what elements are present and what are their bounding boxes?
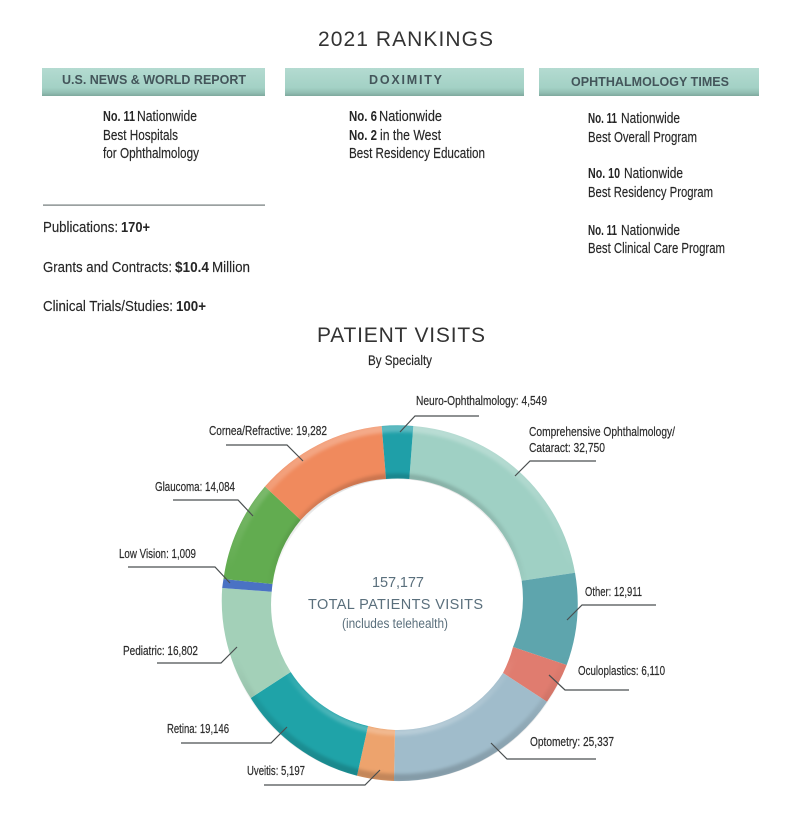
rank: No. 6 nationwide: Nationwide xyxy=(379,108,442,125)
label: optometry: Optometry: 25,337 xyxy=(530,734,614,749)
panel: statistics xyxy=(43,204,265,315)
center text: total patient visits xyxy=(308,575,483,631)
text: best hospitals: Best Hospitals xyxy=(103,127,178,144)
rank: No. 6 nationwide: No. 6 xyxy=(349,108,377,125)
label: optometry xyxy=(491,734,614,759)
stat: publications: 170+ xyxy=(121,219,150,236)
segment: low vision xyxy=(222,579,272,592)
label: low vision: Low Vision: 1,009 xyxy=(119,546,196,561)
segment: glaucoma xyxy=(224,486,301,584)
label: retina: Retina: 19,146 xyxy=(167,721,229,736)
label: uveitis xyxy=(247,763,380,785)
rank: No. 11 nationwide xyxy=(103,108,197,125)
label: glaucoma xyxy=(155,479,253,516)
rank: No. 11 nationwide: Nationwide xyxy=(137,108,197,125)
panel: Doximity xyxy=(285,68,524,162)
label: uveitis: Uveitis: 5,197 xyxy=(247,763,305,778)
rank: clinical care: No. 11 xyxy=(588,222,617,239)
rank: residency: Nationwide xyxy=(624,165,683,182)
label: oculoplastics xyxy=(549,663,665,690)
label: comprehensive ophthalmology: Cataract: 32,750 xyxy=(529,440,605,455)
label: cornea/refractive: Cornea/Refractive: 19,282 xyxy=(209,423,327,438)
rank: overall: Nationwide xyxy=(621,110,680,127)
rank: clinical care: Best Clinical Care Program xyxy=(588,240,725,257)
rank: overall: Best Overall Program xyxy=(588,129,697,146)
segment: other xyxy=(513,573,578,665)
stat: grants and contracts: $10.4 xyxy=(175,259,210,276)
stat: clinical trials: 100+ xyxy=(176,298,206,315)
segment: cornea/refractive xyxy=(265,426,386,520)
label: neuro-ophthalmology: Neuro-Ophthalmology: 4,549 xyxy=(416,393,547,408)
heading: Ophthalmology Times: OPHTHALMOLOGY TIMES xyxy=(571,75,729,89)
center text: total patient visits: TOTAL PATIENTS VISITS xyxy=(308,597,483,613)
rank: clinical care xyxy=(588,222,725,257)
stat: publications: Publications: xyxy=(43,219,118,236)
label: glaucoma: Glaucoma: 14,084 xyxy=(155,479,235,494)
segment: optometry xyxy=(394,673,547,781)
rank: No. 2 in the West: in the West xyxy=(380,127,442,144)
label: low vision xyxy=(119,546,230,583)
label: comprehensive ophthalmology xyxy=(515,424,675,476)
segment: neuro-ophthalmology xyxy=(382,425,413,479)
segment: oculoplastics xyxy=(503,647,567,702)
rank: clinical care: Nationwide xyxy=(621,222,680,239)
rank: No. 6 nationwide xyxy=(349,108,442,125)
banner: Doximity xyxy=(285,68,524,96)
stat: grants and contracts: Grants and Contracts: xyxy=(43,259,172,276)
rank: residency xyxy=(588,165,713,201)
rank: residency: No. 10 xyxy=(588,165,620,182)
center text: total patient visits: 157,177 xyxy=(372,575,424,591)
label: other: Other: 12,911 xyxy=(585,584,642,599)
segment: uveitis xyxy=(357,726,395,781)
label: pediatric: Pediatric: 16,802 xyxy=(123,643,198,658)
label: neuro-ophthalmology xyxy=(400,393,547,432)
subheading: by specialty: By Specialty xyxy=(368,352,432,368)
heading: patient visits: PATIENT VISITS xyxy=(317,324,485,347)
center text: total patient visits: (includes telehealth) xyxy=(342,616,448,631)
label: comprehensive ophthalmology: Comprehensive Ophthalmology/ xyxy=(529,424,675,439)
segment: retina xyxy=(251,672,368,776)
rank: No. 2 in the West xyxy=(349,127,442,144)
label: retina xyxy=(167,721,287,743)
heading: U.S. News: U.S. NEWS & WORLD REPORT xyxy=(62,73,246,87)
title: 2021 rankings: 2021 RANKINGS xyxy=(318,28,493,51)
segment: pediatric xyxy=(222,588,291,698)
stat: clinical trials: Clinical Trials/Studies: xyxy=(43,298,173,315)
panel: U.S. News & World Report xyxy=(42,68,265,162)
rank: No. 2 in the West: No. 2 xyxy=(349,127,377,144)
rank: residency: Best Residency Program xyxy=(588,184,713,201)
rank: overall xyxy=(588,110,697,146)
label: oculoplastics: Oculoplastics: 6,110 xyxy=(578,663,665,678)
text: for ophthalmology: for Ophthalmology xyxy=(103,145,199,162)
rank: No. 11 nationwide: No. 11 xyxy=(103,108,135,125)
label: pediatric xyxy=(123,643,237,663)
segment: comprehensive ophthalmology xyxy=(409,426,575,581)
donut chart: patient visits by specialty xyxy=(222,425,578,781)
banner: U.S. News xyxy=(42,68,265,96)
panel: Ophthalmology Times xyxy=(539,68,759,257)
heading: Doximity: DOXIMITY xyxy=(369,73,443,87)
text: best residency education: Best Residency Education xyxy=(349,145,485,162)
stat: grants and contracts: Million xyxy=(212,259,250,276)
label: other xyxy=(567,584,656,620)
label: cornea/refractive xyxy=(209,423,327,461)
banner: Ophthalmology Times xyxy=(539,68,759,96)
rank: overall: No. 11 xyxy=(588,110,617,127)
